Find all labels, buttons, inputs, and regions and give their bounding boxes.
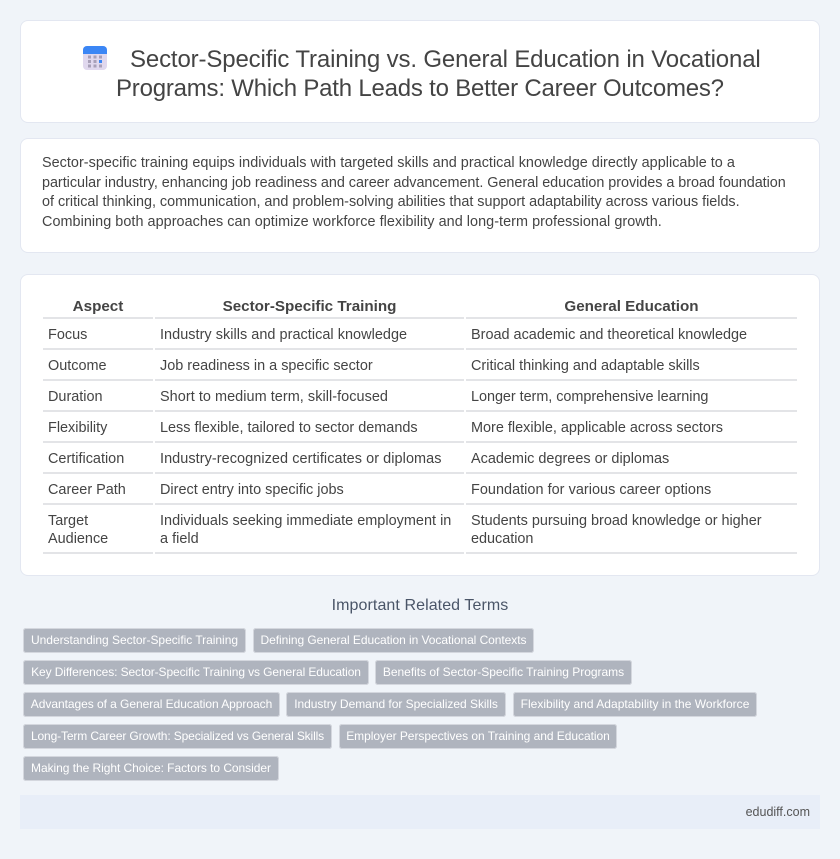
row: target audience: education [471, 531, 533, 547]
row: career path: Foundation for various career options [471, 482, 711, 498]
intro paragraph: Combining both approaches can optimize workforce flexibility and long-term professional growth. [42, 214, 662, 230]
footer bar [20, 795, 820, 829]
footer source text: edudiff.com [746, 805, 810, 819]
related term tags [23, 628, 757, 781]
row: focus: Broad academic and theoretical knowledge [471, 327, 747, 343]
tag [23, 756, 279, 781]
intro paragraph: particular industry, enhancing job readiness and career advancement. General education provides a broad foundation [42, 174, 786, 190]
tag [23, 660, 369, 685]
row: target audience: Audience [48, 531, 108, 547]
row: target audience: Students pursuing broad knowledge or higher [471, 513, 762, 529]
tag: Making the Right Choice: Factors to Consider [31, 761, 271, 775]
tag [23, 724, 332, 749]
intro paragraph: of critical thinking, communication, and problem-solving abilities that support adaptability across various fields. [42, 194, 740, 210]
table header: Sector-Specific Training [223, 298, 396, 315]
table header [73, 298, 699, 315]
row: certification: Certification [48, 451, 124, 467]
tag: Long-Term Career Growth: Specialized vs General Skills [31, 729, 324, 743]
row: outcome: Job readiness in a specific sector [160, 358, 373, 374]
row: focus: Industry skills and practical knowledge [160, 327, 407, 343]
row: certification [48, 451, 669, 467]
row: certification: Academic degrees or diplomas [471, 451, 669, 467]
row: career path: Direct entry into specific jobs [160, 482, 344, 498]
tag: Advantages of a General Education Approach [31, 697, 272, 711]
row: career path [48, 482, 711, 498]
row: target audience: Individuals seeking immediate employment in [160, 513, 451, 529]
row: flexibility: Flexibility [48, 420, 107, 436]
tag [286, 692, 506, 717]
row: duration: Longer term, comprehensive learning [471, 389, 708, 405]
row: flexibility: More flexible, applicable across sectors [471, 420, 723, 436]
tag [253, 628, 534, 653]
row: duration [48, 389, 708, 405]
row: target audience: Target [48, 513, 88, 529]
panel: intro text [20, 138, 820, 253]
tag: Defining General Education in Vocational Contexts [261, 633, 526, 647]
row: focus: Focus [48, 327, 87, 343]
row: outcome: Outcome [48, 358, 107, 374]
tag [23, 692, 280, 717]
row: focus [48, 327, 747, 343]
table header: Aspect [73, 298, 123, 315]
tag: Benefits of Sector-Specific Training Programs [383, 665, 624, 679]
icon: calendar [83, 46, 107, 70]
title [116, 46, 761, 102]
row: duration: Short to medium term, skill-focused [160, 389, 388, 405]
tag: Employer Perspectives on Training and Education [346, 729, 610, 743]
panel: comparison table [20, 274, 820, 576]
tag: Flexibility and Adaptability in the Workforce [521, 697, 749, 711]
row: flexibility [48, 420, 723, 436]
title: Programs: Which Path Leads to Better Career Outcomes? [116, 75, 724, 102]
intro paragraph [42, 155, 786, 230]
row: outcome [48, 358, 700, 374]
row: target audience [48, 513, 762, 547]
title: Sector-Specific Training vs. General Education in Vocational [130, 46, 761, 73]
heading: important related terms: Important Related Terms [332, 597, 508, 614]
row: career path: Career Path [48, 482, 126, 498]
intro paragraph: Sector-specific training equips individuals with targeted skills and practical knowledge directly applicable to a [42, 155, 735, 171]
tag: Understanding Sector-Specific Training [31, 633, 238, 647]
row: outcome: Critical thinking and adaptable skills [471, 358, 700, 374]
tag [513, 692, 757, 717]
panel: title card [20, 20, 820, 123]
tag: Industry Demand for Specialized Skills [294, 697, 498, 711]
row: certification: Industry-recognized certificates or diplomas [160, 451, 442, 467]
tag [375, 660, 632, 685]
tag [339, 724, 617, 749]
table header: General Education [564, 298, 699, 315]
tag [23, 628, 246, 653]
row: flexibility: Less flexible, tailored to sector demands [160, 420, 418, 436]
row: target audience: a field [160, 531, 199, 547]
row: duration: Duration [48, 389, 103, 405]
tag: Key Differences: Sector-Specific Training vs General Education [31, 665, 361, 679]
